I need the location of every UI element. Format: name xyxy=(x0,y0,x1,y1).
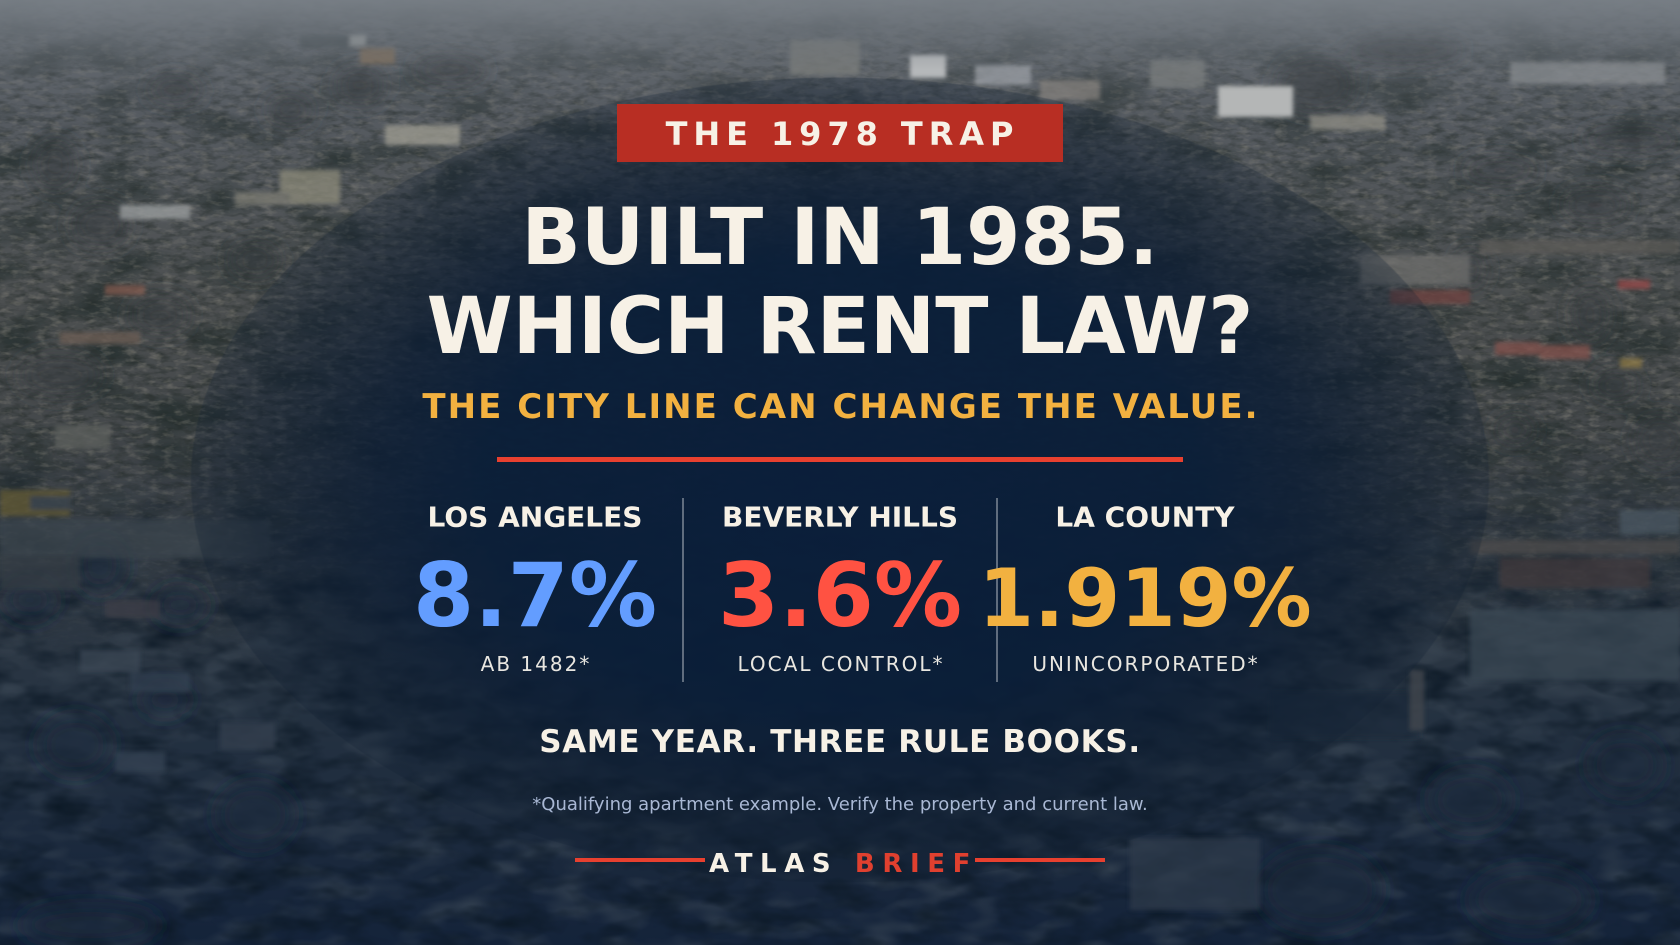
brand: atlas brief: ATLAS BRIEF xyxy=(709,849,978,879)
stat: la county: LA COUNTY xyxy=(1055,500,1235,534)
stat: la county: UNINCORPORATED* xyxy=(1032,652,1260,676)
divider xyxy=(682,498,684,682)
stat: los angeles xyxy=(413,500,657,676)
title xyxy=(427,193,1253,372)
title: BUILT IN 1985. xyxy=(521,193,1159,283)
subtitle: THE CITY LINE CAN CHANGE THE VALUE. xyxy=(422,387,1260,427)
stat: beverly hills xyxy=(718,500,962,676)
dark central vignette xyxy=(190,77,1490,883)
red rule xyxy=(497,457,1183,462)
divider xyxy=(996,498,998,682)
brand: atlas brief xyxy=(575,849,1105,879)
stat: beverly hills: 3.6% xyxy=(718,544,962,647)
footnote: *Qualifying apartment example. Verify the property and current law. xyxy=(532,794,1148,815)
stat: la county xyxy=(978,500,1312,676)
takeaway: SAME YEAR. THREE RULE BOOKS. xyxy=(539,724,1141,760)
tag: the 1978 trap xyxy=(617,104,1063,162)
tag: the 1978 trap: THE 1978 TRAP xyxy=(666,115,1019,153)
stat: beverly hills: LOCAL CONTROL* xyxy=(738,652,944,676)
stat: la county: 1.919% xyxy=(978,552,1312,645)
stat: los angeles: LOS ANGELES xyxy=(428,500,642,534)
title: WHICH RENT LAW? xyxy=(427,282,1253,372)
stat: beverly hills: BEVERLY HILLS xyxy=(722,500,958,534)
stat: los angeles: AB 1482* xyxy=(481,652,591,676)
stat: los angeles: 8.7% xyxy=(413,544,657,647)
